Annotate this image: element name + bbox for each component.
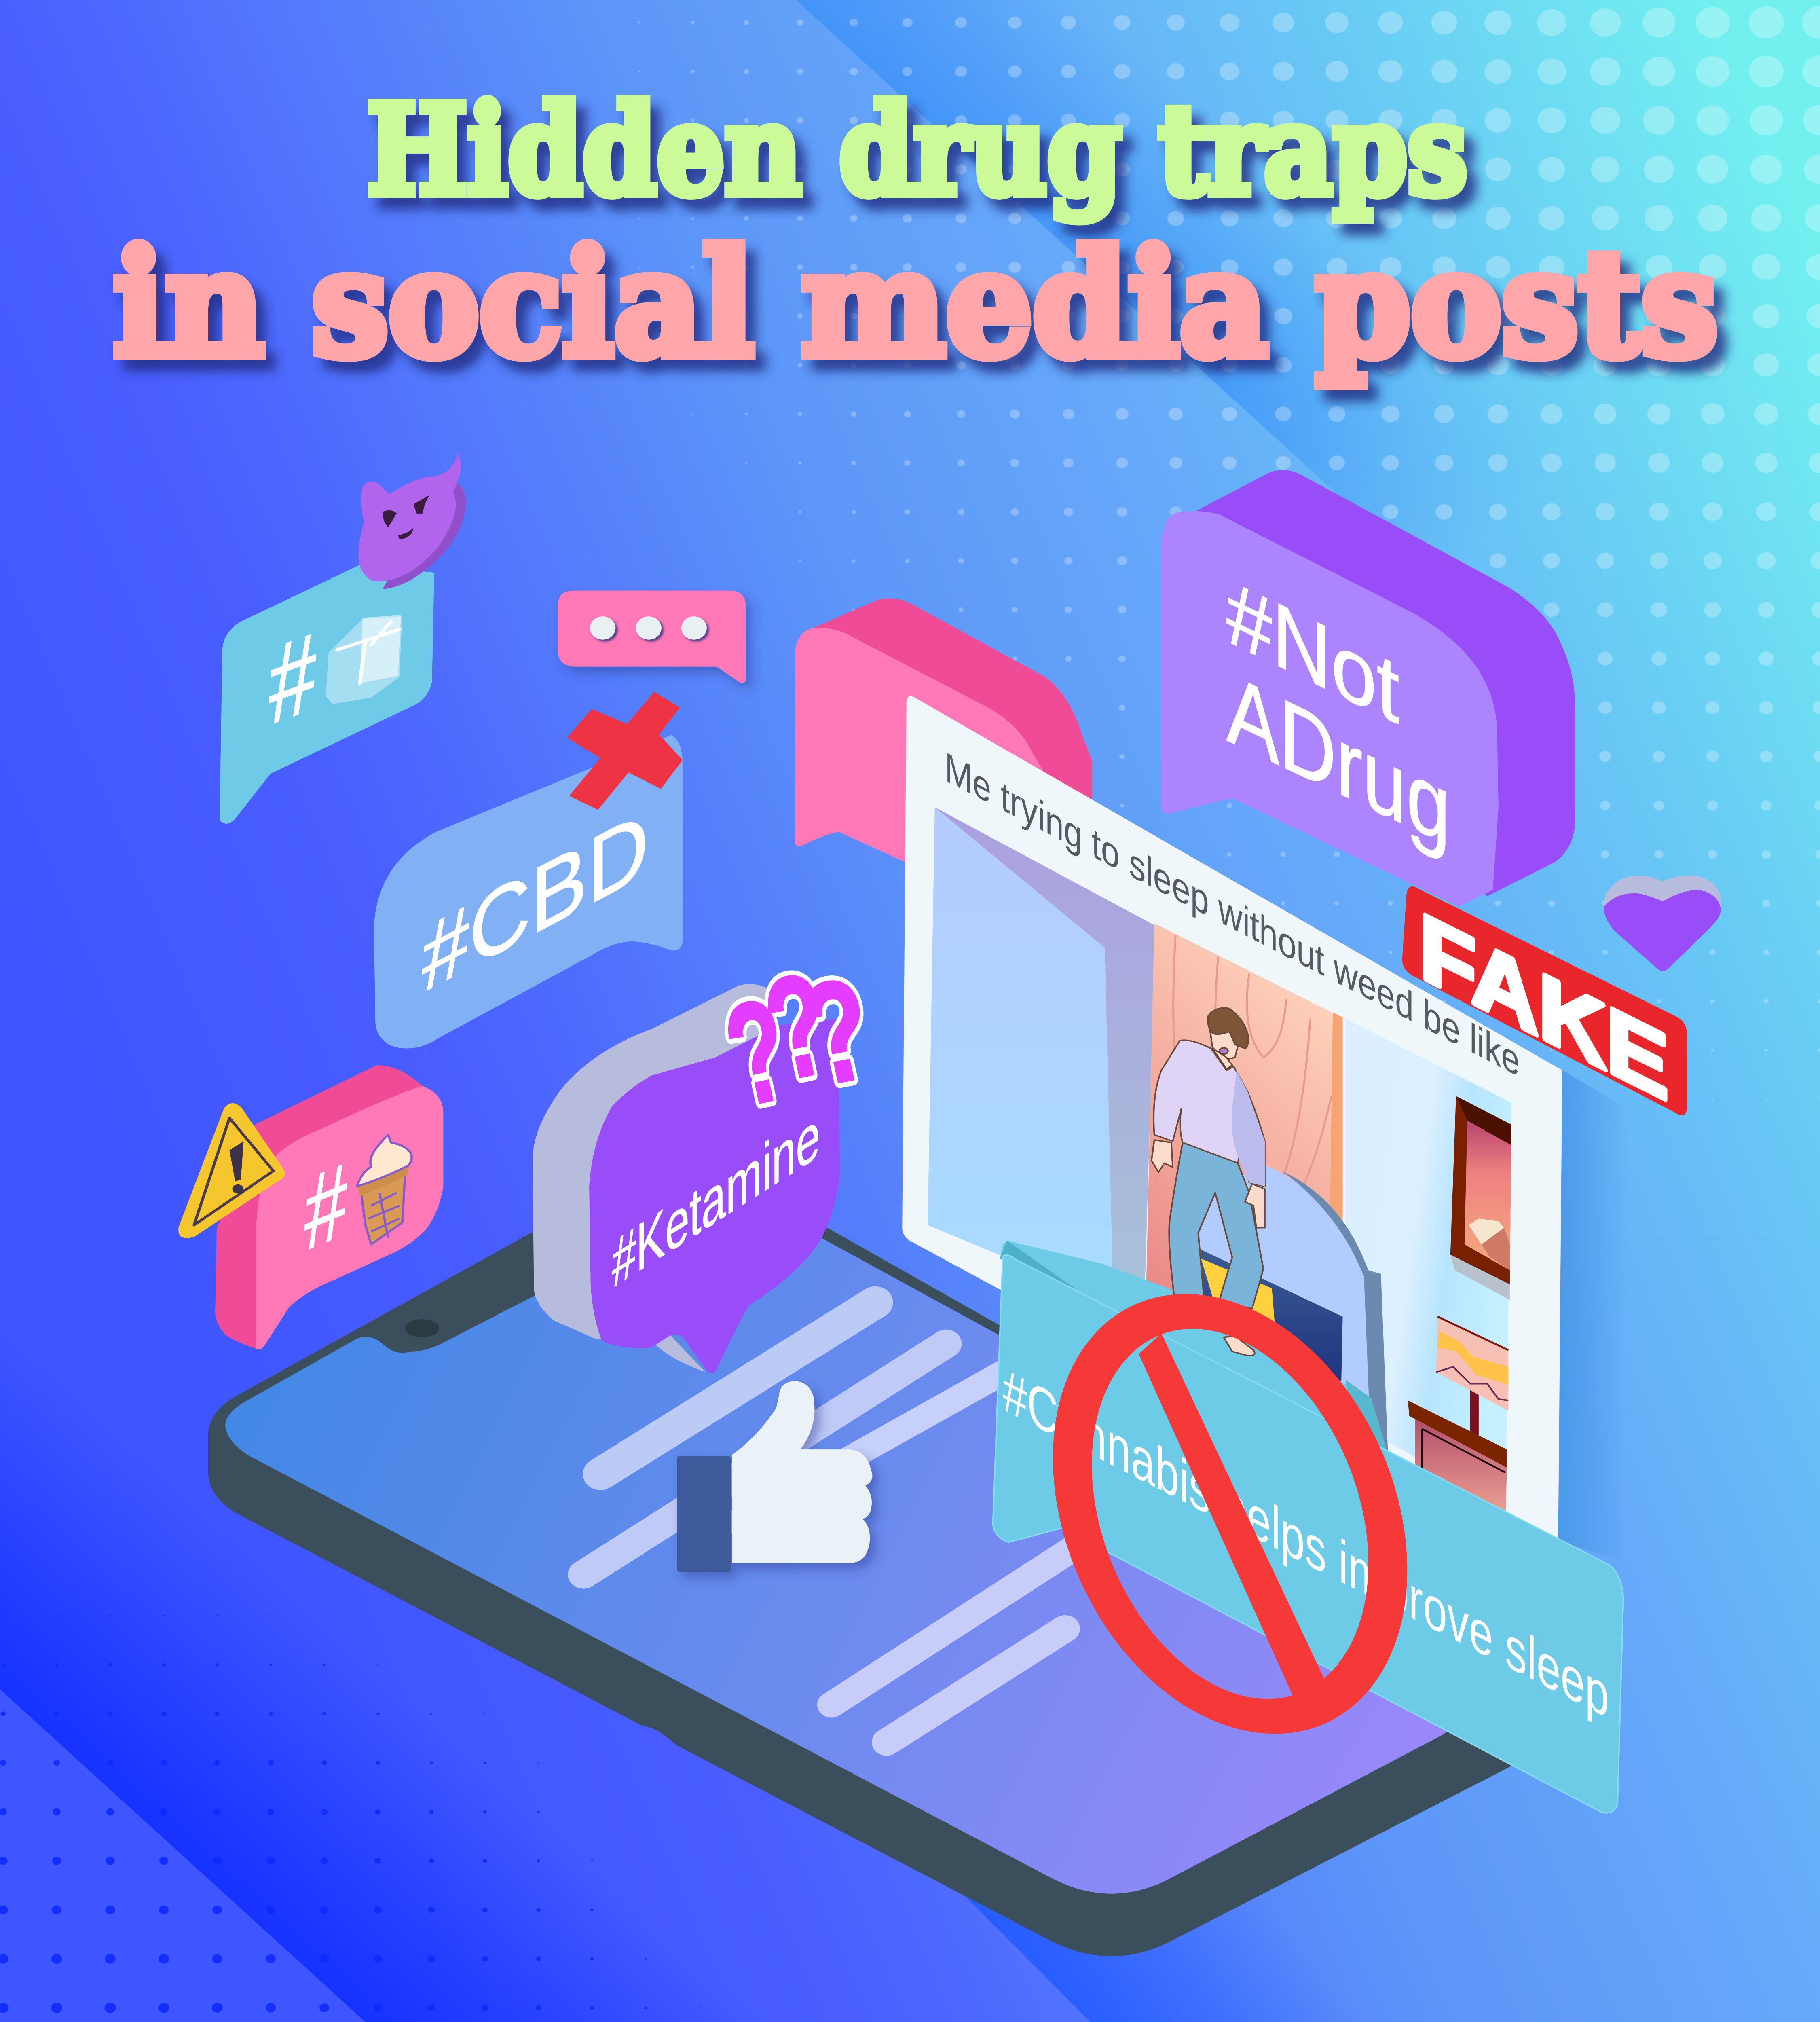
bubble front: [256, 1086, 443, 1349]
hash sign: #: [269, 609, 316, 748]
FAKE stamp: [1402, 886, 1687, 1121]
ice cream icon: [357, 1135, 412, 1244]
halftone dots bottom left: [0, 1586, 991, 2022]
CBD bubble: [374, 735, 683, 1048]
phone screen: [225, 1188, 1562, 1894]
exclamation mark: [229, 1141, 243, 1181]
title line 1: Hidden drug traps: [367, 77, 1467, 223]
background diagonal band bottom centre: [907, 1838, 1416, 2022]
wall recess: [935, 807, 1156, 1303]
bubble front: [589, 1019, 840, 1373]
left wall: [928, 807, 1113, 1303]
teal bubble with hash and ice: [220, 565, 434, 824]
bubble side: [813, 599, 1092, 825]
post caption: Me trying to sleep without weed be like: [945, 743, 1520, 1086]
background diagonal band top right: [796, 0, 1408, 522]
social media post card: [902, 696, 1629, 1560]
pink bubble with hash and ice cream: [215, 1065, 443, 1349]
bubble front: [795, 628, 1119, 903]
person figure: [1152, 1008, 1265, 1356]
question marks: ?: [713, 968, 801, 1136]
text: #Ketamine: #Ketamine: [612, 1095, 820, 1303]
bubble side: [1194, 470, 1575, 896]
bubble side: [215, 1065, 422, 1349]
purple speech bubble #NotADrug: [1161, 470, 1575, 907]
question marks: ?: [753, 943, 843, 1110]
lamp: [1436, 1317, 1508, 1442]
person foot: [1224, 1336, 1255, 1356]
prohibition sign: [1037, 1311, 1423, 1716]
person hands: [1152, 1140, 1265, 1228]
question marks: ?: [790, 948, 886, 1116]
title: [113, 77, 1718, 389]
text: ADrug: ADrug: [1226, 652, 1450, 867]
card frame: [902, 696, 1562, 1560]
devil emoji: [358, 453, 466, 589]
heart icon: [1604, 876, 1721, 971]
bubble front: [1161, 511, 1499, 907]
typing dots: [590, 616, 707, 640]
text lines on screen: [583, 1303, 1091, 1742]
right wall: [1346, 1019, 1511, 1508]
ice cube icon: [326, 615, 402, 704]
person hair: [1208, 1008, 1248, 1048]
question marks: [713, 943, 886, 1136]
bubble side: [533, 984, 779, 1372]
picture frame: [1450, 1096, 1511, 1300]
card shadow: [1558, 1070, 1629, 1560]
bed headboard: [1198, 1164, 1371, 1406]
nightstand: [1408, 1400, 1507, 1522]
background diagonal band bottom left: [0, 851, 1275, 2022]
text: #Not: #Not: [1226, 559, 1399, 744]
question marks: ?: [713, 968, 801, 1136]
person sweater: [1154, 1040, 1265, 1187]
hash sign: #: [304, 1140, 347, 1273]
question marks: ?: [753, 943, 843, 1110]
question marks: ?: [790, 948, 886, 1116]
halftone dots top right: [425, 0, 1820, 1238]
person jeans: [1169, 1142, 1263, 1309]
phone body: [208, 1153, 1586, 1956]
Ketamine bubble: [533, 943, 886, 1373]
camera: [405, 1319, 439, 1337]
curtain: [1146, 923, 1343, 1303]
yellow pillow: [1201, 1258, 1275, 1323]
teal sign: cannabis claim: [993, 1255, 1623, 1813]
smartphone: [208, 1153, 1586, 1956]
back teal plate of the sign: [1000, 1241, 1388, 1455]
navy pillow: [1198, 1248, 1343, 1382]
warning triangle icon: [180, 1104, 283, 1237]
pink typing bubble: [558, 590, 746, 683]
text: FAKE: FAKE: [1419, 893, 1668, 1121]
red X mark: [569, 693, 681, 808]
text: #CBD: #CBD: [422, 789, 649, 1013]
thumbs up icon: [677, 1381, 872, 1572]
pink speech bubble behind post: [795, 599, 1119, 903]
person head: [1209, 1026, 1241, 1060]
